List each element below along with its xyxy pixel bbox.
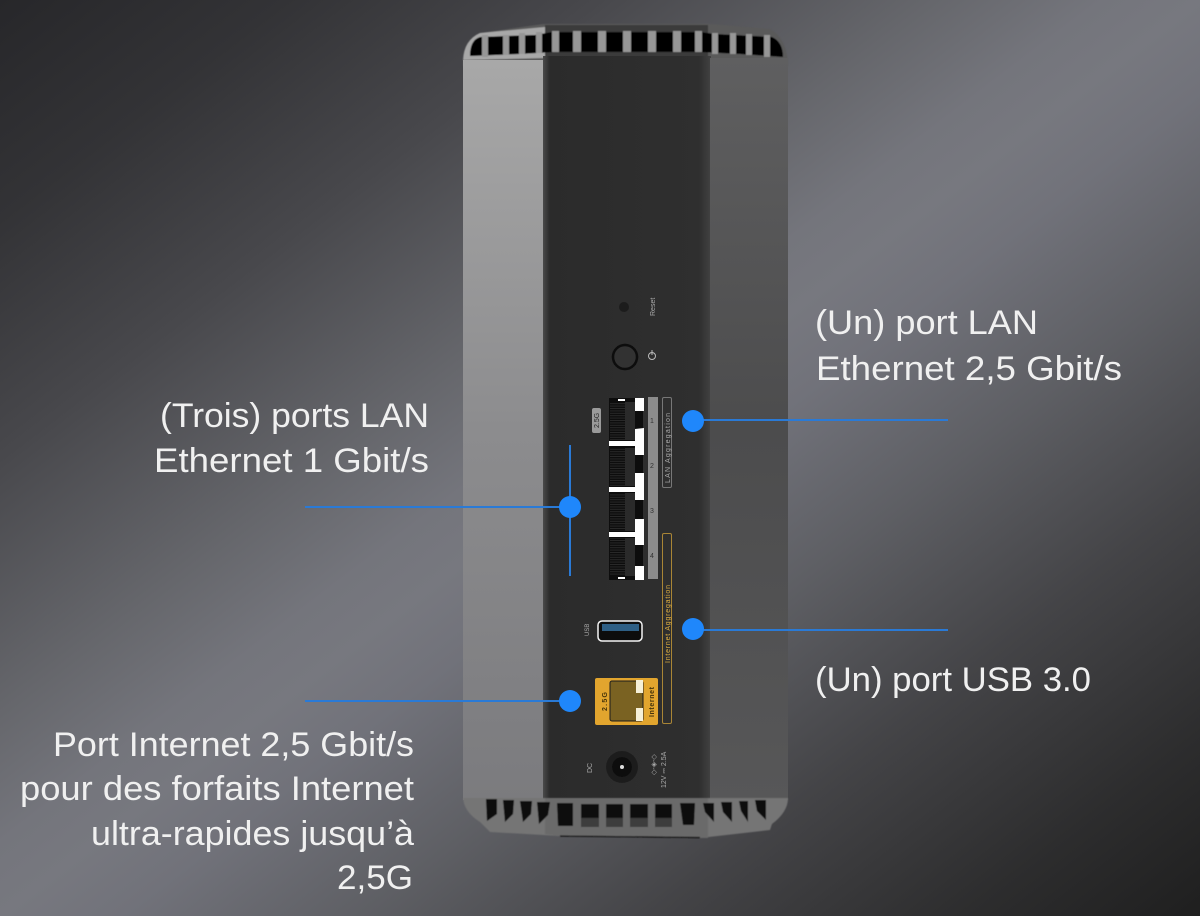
callout: internet port: pour des forfaits Internet [20,770,415,808]
reset button: Reset [650,298,657,316]
center body panel [543,56,711,800]
port number strip: 2 [650,463,654,470]
internet aggregation label: Internet Aggregation [665,585,672,663]
2.5G badge: 2.5G [594,413,601,428]
power button [613,345,656,369]
top vent band [463,24,788,66]
reset button [619,298,657,316]
DC jack [587,751,668,788]
callout: internet port: Port Internet 2,5 Gbit/s [53,726,414,764]
LAN ports [609,398,644,580]
callout: LAN 1G: Ethernet 1 Gbit/s [154,442,429,480]
DC jack: 12V ⎓ 2.5A [661,751,668,788]
DC jack: DC [587,763,594,773]
DC jack: ◇-◈-◇ [651,754,658,775]
callout: LAN 2.5G: (Un) port LAN [815,304,1038,342]
port number strip: 4 [650,553,654,560]
port number strip: 1 [650,418,654,425]
callout: internet port [20,690,581,897]
callout: USB [682,618,1091,699]
callout: LAN 1G: (Trois) ports LAN [160,397,429,435]
internet port [595,678,658,725]
right body panel [710,58,788,800]
port number strip [648,397,658,579]
callout: LAN 2.5G [682,304,1122,432]
port number strip: 3 [650,508,654,515]
callout: internet port: ultra-rapides jusqu’à [91,815,414,853]
callout: USB: (Un) port USB 3.0 [815,661,1091,699]
internet port: Internet [649,686,656,717]
callout: internet port: 2,5G [337,859,413,897]
left body panel [463,60,545,800]
2.5G badge [592,408,601,433]
USB port: USB [585,624,591,636]
internet port: 2.5G [602,691,609,711]
router [463,24,788,838]
internet aggregation label [662,534,672,724]
LAN aggregation label: LAN Aggregation [665,413,672,483]
LAN aggregation label [662,398,672,488]
callout: LAN 1G [154,397,581,576]
USB port [585,621,642,641]
callout: LAN 2.5G: Ethernet 2,5 Gbit/s [816,350,1122,388]
bottom vent band [463,798,788,838]
